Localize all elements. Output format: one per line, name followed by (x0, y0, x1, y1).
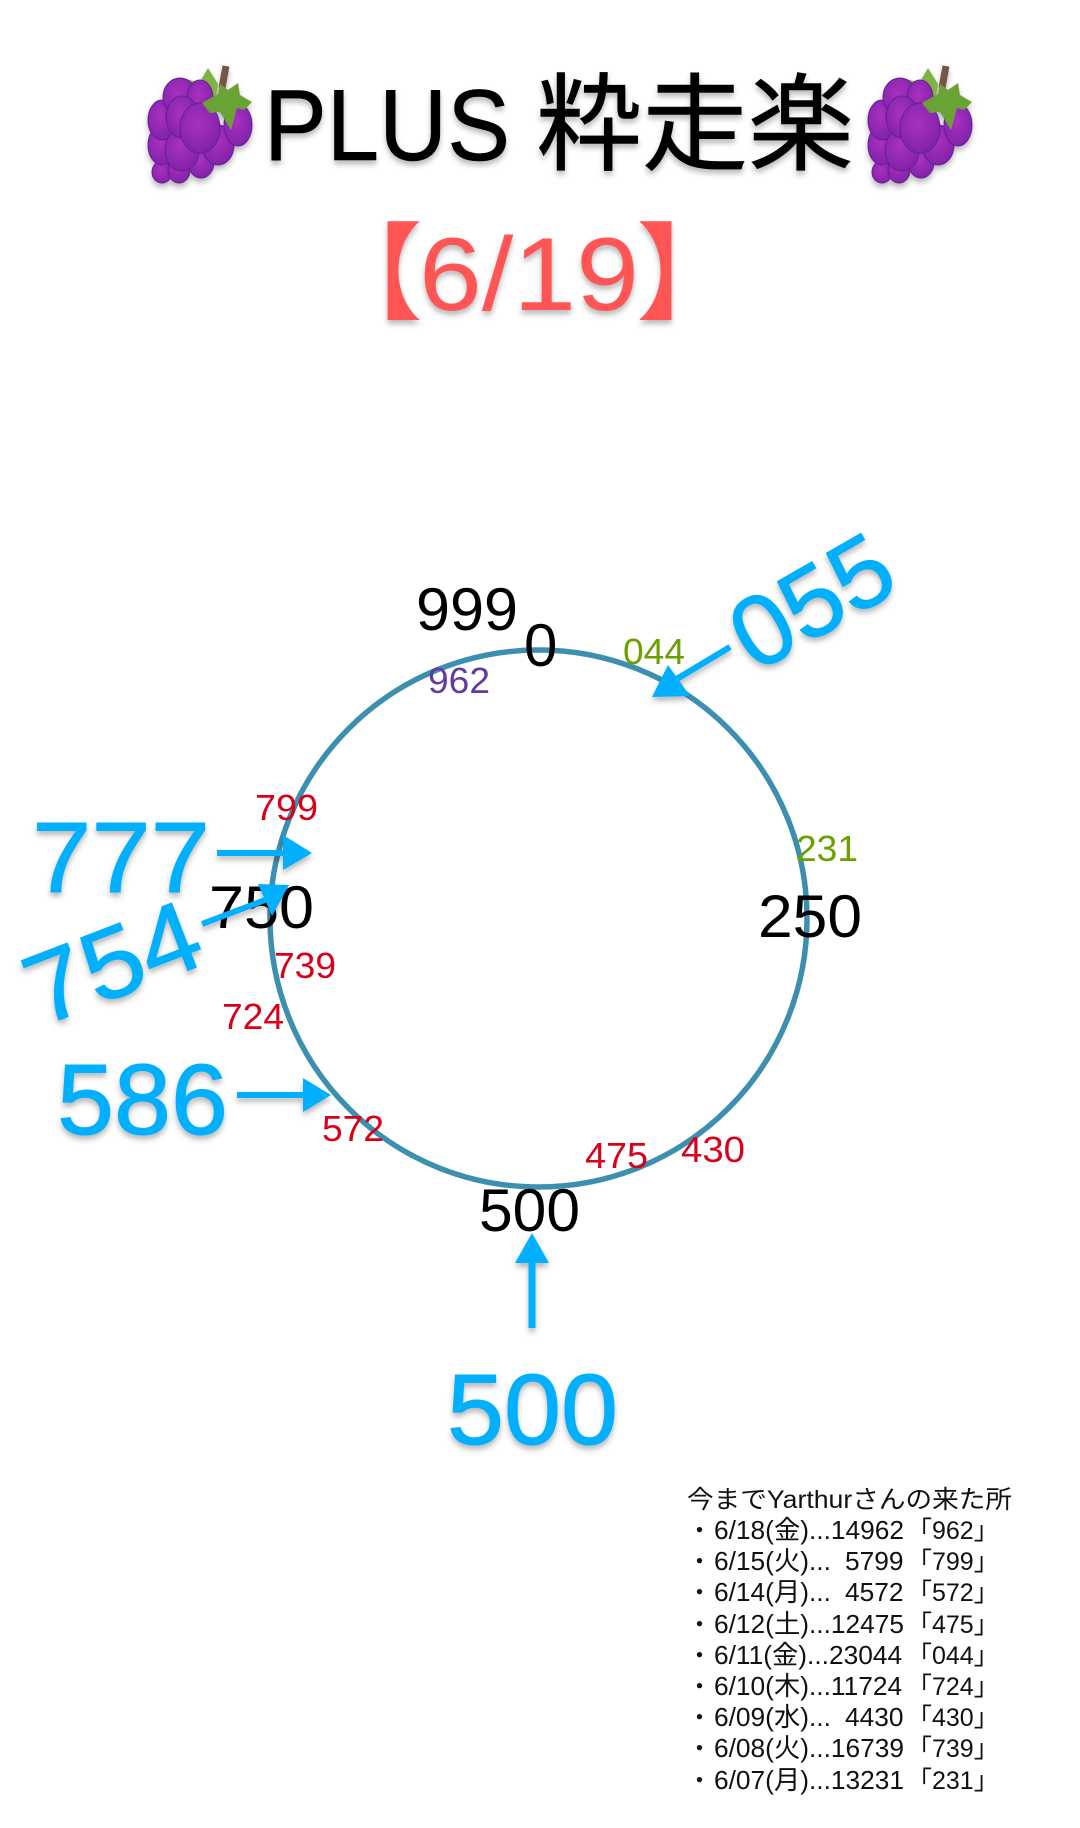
past hit labels: 044 (623, 631, 685, 672)
list items (687, 1515, 999, 1795)
list items: ・ (687, 1579, 712, 1607)
list items: 6/07(月)...13231 (714, 1765, 904, 1795)
scale labels: 999 (416, 576, 518, 643)
callout: 500 (447, 1233, 618, 1466)
past hit labels: 739 (274, 945, 336, 986)
callout: 777: 777 (32, 802, 210, 914)
list items: 「475」 (907, 1611, 999, 1639)
list items: 6/08(火)...16739 (714, 1733, 904, 1763)
past hit labels: 962 (428, 660, 490, 701)
list items: 6/09(水)... (714, 1702, 831, 1732)
callout: 055: 055 (710, 511, 914, 693)
callout: 754: 754 (9, 878, 217, 1047)
list items: ・ (687, 1611, 712, 1639)
title text latin: PLUS (264, 70, 510, 182)
callout: 777 (32, 802, 312, 914)
list items: 「724」 (907, 1673, 999, 1701)
scale labels: 500 (479, 1177, 580, 1244)
callout number 500: 500 (447, 1354, 618, 1466)
list items: 6/14(月)... (714, 1577, 831, 1607)
past hit labels: 231 (796, 828, 858, 869)
list items: ・ (687, 1767, 712, 1795)
list items: 6/10(木)...11724 (714, 1671, 902, 1701)
callout: 754 (9, 878, 289, 1047)
arrow: 055 (652, 647, 730, 697)
list items: 6/12(土)...12475 (714, 1609, 904, 1639)
chart: number circle (270, 650, 807, 1187)
callout: 586: 586 (57, 1044, 228, 1156)
scale labels: 250 (758, 883, 862, 950)
past hit labels: 430 (681, 1129, 745, 1170)
past hit labels: 724 (222, 996, 284, 1037)
list items: ・ (687, 1673, 712, 1701)
list items: 6/11(金)...23044 (714, 1640, 902, 1670)
arrow: 500 (515, 1233, 549, 1328)
icon: grapes right (868, 66, 972, 183)
list items: 4430 (845, 1702, 904, 1732)
date heading (317, 216, 742, 334)
list heading: 今までYarthurさんの来た所 (687, 1486, 1012, 1514)
past hit labels (222, 631, 858, 1176)
arrow: 777 (217, 835, 312, 870)
text block: past visits list (687, 1486, 1012, 1795)
list items: 4572 (845, 1577, 904, 1607)
list items: ・ (687, 1642, 712, 1670)
date heading: 】 (636, 216, 742, 334)
title (148, 66, 972, 185)
scale labels: 750 (209, 874, 314, 941)
list items: 6/15(火)... (714, 1546, 831, 1576)
scale labels (209, 576, 862, 1244)
list items: ・ (687, 1517, 712, 1545)
list items: 「962」 (907, 1517, 999, 1545)
list items: 「799」 (907, 1548, 999, 1576)
list items: 「044」 (907, 1642, 999, 1670)
list items: 「739」 (907, 1735, 999, 1763)
past hit labels: 799 (255, 787, 318, 828)
list items: 「231」 (907, 1767, 999, 1795)
list items: 6/18(金)...14962 (714, 1515, 904, 1545)
icon: grapes left (148, 66, 252, 183)
list items: 「572」 (907, 1579, 999, 1607)
list items: ・ (687, 1548, 712, 1576)
date heading: 6/19 (419, 217, 639, 333)
list items: ・ (687, 1735, 712, 1763)
title text kanji: 粋走楽 (536, 67, 854, 185)
scale labels: 0 (524, 612, 557, 679)
list items: 「430」 (907, 1704, 999, 1732)
arrow: 586 (237, 1078, 331, 1112)
list items: 5799 (845, 1546, 904, 1576)
past hit labels: 475 (585, 1135, 648, 1176)
arrow: 754 (202, 884, 289, 924)
date heading: 【 (317, 216, 423, 334)
past hit labels: 572 (322, 1108, 384, 1149)
list items: ・ (687, 1704, 712, 1732)
callout: 586 (57, 1044, 331, 1156)
